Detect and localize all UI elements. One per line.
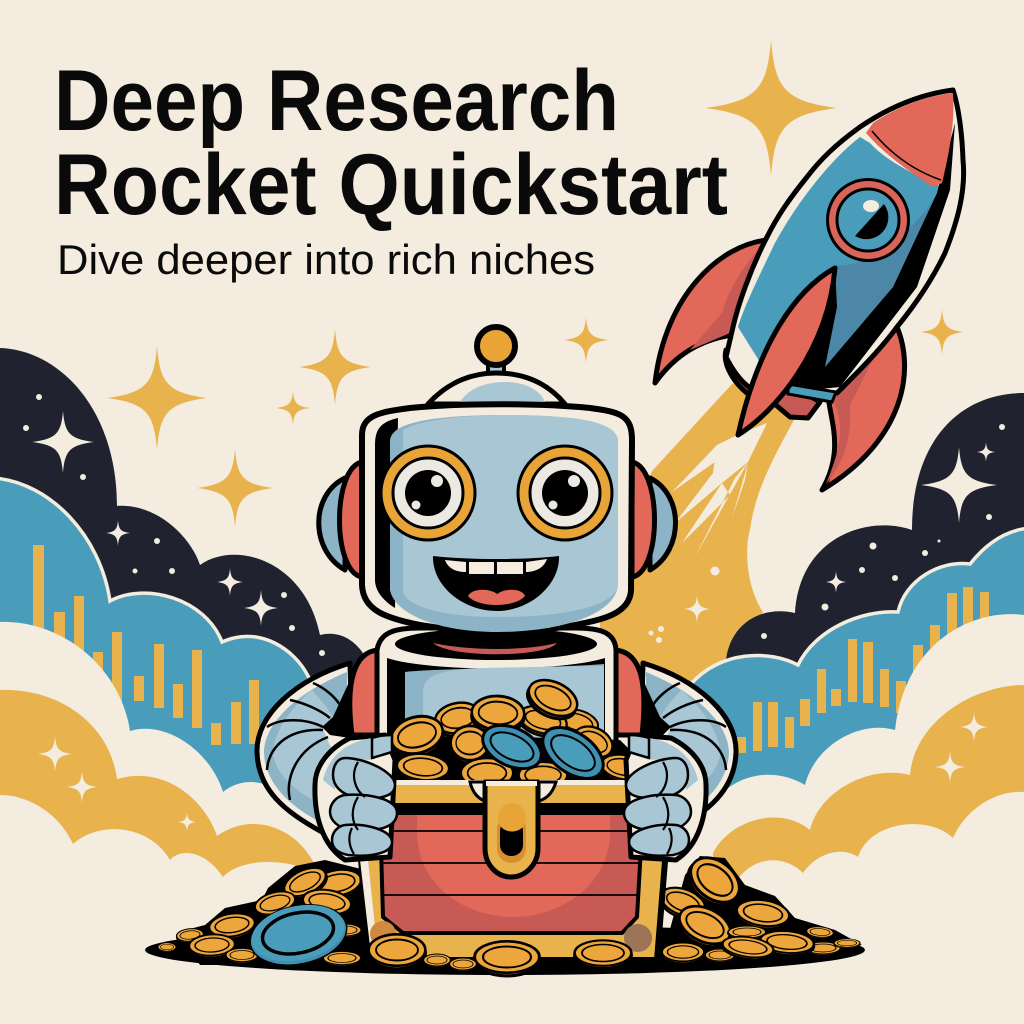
clouds: left yellow layer [0,690,330,900]
chest lid [383,781,640,805]
chart bars: left [33,545,259,745]
robot right eye [518,446,612,540]
title: Deep Research [54,53,619,149]
title: Rocket Quickstart [54,137,728,233]
rocket centre fin [738,268,835,435]
coins in chest [367,673,646,791]
chest hasp [470,781,556,877]
robot dome [428,373,565,404]
rocket window [826,178,910,262]
robot antenna [477,327,515,378]
chest front panel [380,813,643,933]
rocket right fin [822,327,905,490]
coins at chest base [369,934,631,976]
stars: gold [107,40,963,527]
rocket nose [866,93,953,187]
rocket body [726,90,964,393]
robot hands [315,735,706,860]
robot ears [319,462,676,577]
right hand [624,735,706,860]
chest body [357,800,670,960]
clouds: right yellow layer [713,685,1024,900]
stars: white [23,394,1005,832]
rocket nozzle [725,350,820,418]
robot [257,327,736,832]
clouds: left cream layer [0,622,360,900]
rocket left fin [655,240,767,383]
robot torso [350,628,644,770]
chart bars: right [737,587,989,753]
robot mouth [433,556,559,611]
robot left eye [381,446,475,540]
coin pile: left [158,860,370,974]
rocket hull [738,137,940,390]
robot left arm [257,663,352,832]
coin pile: right [656,849,862,965]
blue coins [476,717,548,777]
clouds: left blue layer [0,478,345,850]
blue coin [244,896,352,974]
treasure chest [357,780,670,960]
clouds: right cream layer [660,614,1024,1024]
rocket black shade [780,123,955,393]
left hand [315,735,397,860]
clouds: right blue layer [690,528,1024,860]
chest rivets [370,921,652,952]
clouds: right navy layer [726,393,1024,800]
ground shadow [145,925,865,975]
robot head [362,404,632,632]
title [54,53,728,233]
clouds: left navy layer [0,348,370,800]
rocket [655,90,964,490]
flame exhaust [600,383,795,700]
robot right arm [641,663,736,832]
subtitle: Dive deeper into rich niches [57,236,595,283]
chest planks [381,831,642,895]
